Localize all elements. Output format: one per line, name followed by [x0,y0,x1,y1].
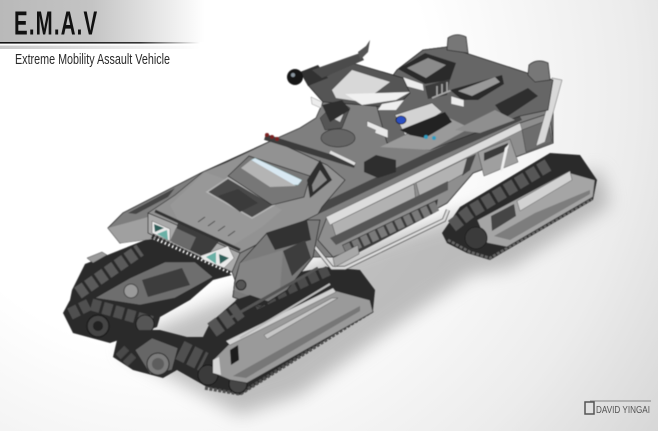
teal sensor right [200,246,234,268]
mesh grilles [403,77,424,91]
rear right track assembly [442,153,597,260]
red lights [265,133,279,141]
roof grill band [303,113,522,218]
barrel rail [265,137,355,165]
wheel hub [135,338,178,374]
hatch panel [207,178,274,218]
turret mesh [311,97,322,108]
subtitle: Extreme Mobility Assault Vehicle [15,51,170,68]
cyan sensors [424,135,428,139]
turret top frame [308,63,410,108]
front side pod [230,220,320,318]
vehicle illustration [63,35,597,395]
front sensor beam [148,211,240,274]
rear vent box right [450,75,504,100]
front track side panel [213,290,373,383]
rear upper deck [367,35,553,150]
antenna spike [358,40,370,60]
deck slots [198,217,235,236]
teal sensor left [152,221,170,241]
ground shadow under vehicle [120,170,610,415]
rear track side panel [477,172,595,247]
center equipment block [395,103,442,135]
rear vent box left [398,53,456,84]
turret [287,40,410,152]
front right track assembly [113,267,375,395]
hull base silhouette [108,47,553,307]
credit signature [585,401,651,416]
front hull deck [108,133,355,253]
gun scope [300,65,328,86]
dark side bin [495,88,538,118]
blue lens [396,116,406,124]
rear towers [447,35,468,53]
vent slats [432,82,452,98]
left fender wing [108,172,203,243]
turret mount block [322,100,350,122]
front left track assembly [63,238,232,343]
title: E.M.A.V [14,4,98,42]
hull side wall [303,78,562,268]
front left suspension arm [95,262,213,305]
windshield frame [228,156,310,205]
windshield glass [251,158,302,185]
front glacis plate [170,172,282,246]
logo mark [585,402,594,414]
black equipment box [364,155,396,178]
title banner [0,0,205,49]
roof strut [307,160,332,198]
